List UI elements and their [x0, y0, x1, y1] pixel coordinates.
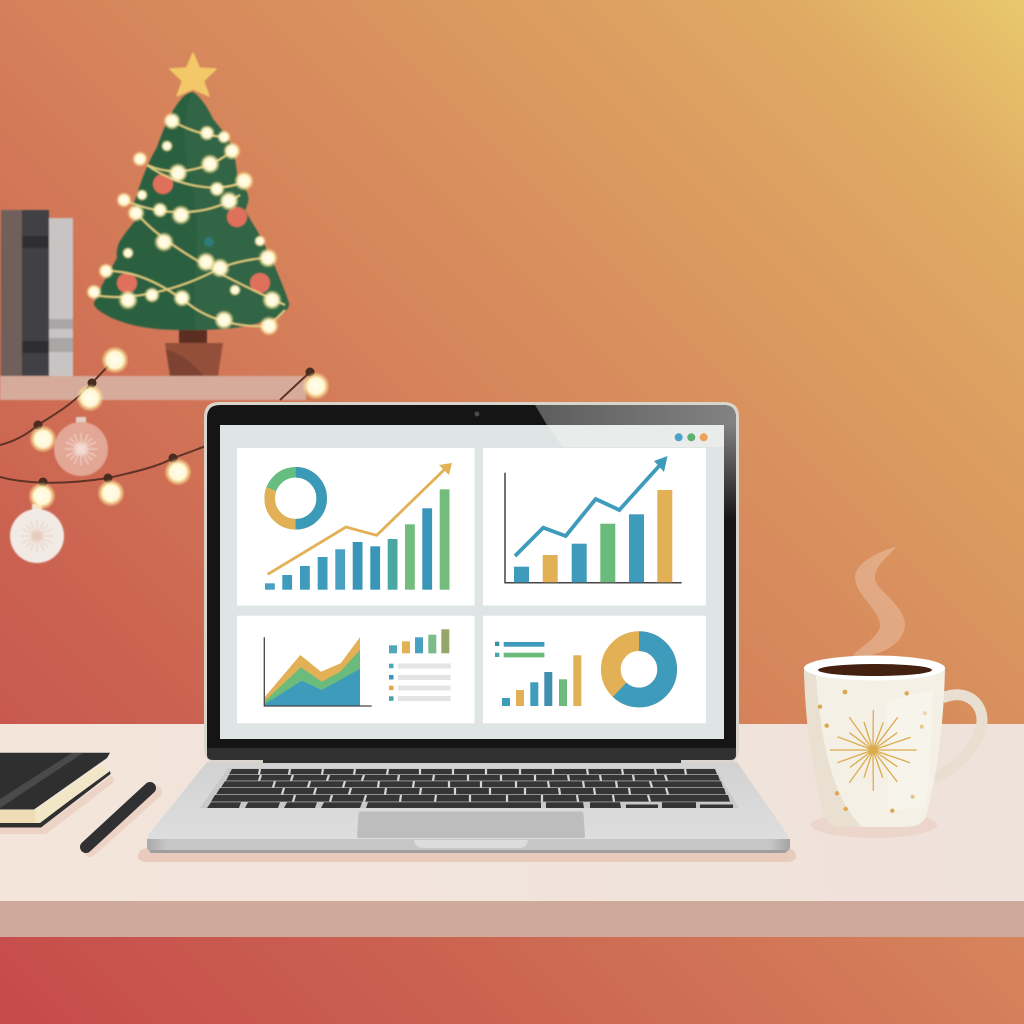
- keyboard well: [200, 768, 739, 808]
- notebook pages: [0, 764, 107, 823]
- coffee mug: [804, 547, 982, 838]
- mini bars: [389, 629, 449, 653]
- panel background: [483, 448, 706, 606]
- mug handle: [933, 695, 982, 778]
- notebook cover: [0, 753, 110, 810]
- tree trunk: [179, 330, 207, 344]
- light bulbs: [28, 346, 330, 510]
- pen: [86, 788, 156, 851]
- mug body: [804, 667, 945, 827]
- column bars: [514, 490, 672, 582]
- desk top: [0, 724, 1024, 901]
- lid frame: [204, 402, 739, 763]
- trackpad: [357, 812, 585, 838]
- screen background: [220, 425, 724, 739]
- mug highlight: [887, 690, 933, 810]
- window dots: [675, 433, 708, 441]
- mug side shade: [804, 667, 862, 827]
- white bauble: [10, 504, 64, 563]
- bar chart: [265, 489, 450, 590]
- tree foliage: [94, 92, 289, 330]
- light wires: [0, 364, 310, 483]
- tree star: [170, 53, 216, 96]
- panel: growth bars and donut: [237, 448, 474, 606]
- tree shading: [185, 92, 289, 330]
- mug dots: [818, 690, 927, 813]
- bezel reflection side: [724, 425, 736, 520]
- panel: column chart with arrow: [483, 448, 706, 606]
- legend: [495, 642, 544, 657]
- notebook back cover: [0, 771, 111, 828]
- notebook: [0, 753, 114, 834]
- screen reflection: [547, 425, 724, 447]
- shelf with books and tree: [0, 53, 306, 400]
- notebook strap: [0, 753, 83, 808]
- string lights: [0, 346, 330, 510]
- coffee: [818, 664, 932, 676]
- mug shadow: [811, 812, 937, 838]
- tree lights: [86, 112, 282, 336]
- screen: [220, 425, 724, 739]
- panel: area chart and list: [237, 616, 474, 723]
- desk: [0, 724, 1024, 937]
- pot shading: [166, 350, 204, 376]
- small bar chart: [502, 655, 581, 706]
- laptop base: [147, 762, 790, 853]
- pen shadow: [90, 792, 156, 851]
- trend arrow: [268, 463, 452, 574]
- books: [1, 210, 73, 376]
- sunburst decoration: [830, 710, 917, 791]
- notebook shadow: [0, 775, 114, 834]
- panel background: [483, 616, 706, 723]
- keyboard: [207, 769, 733, 808]
- christmas tree: [86, 53, 289, 376]
- desk front edge: [0, 901, 1024, 937]
- panel background: [237, 616, 474, 723]
- plant pot: [165, 343, 223, 376]
- shelf board: [0, 376, 306, 400]
- pink bauble: [54, 417, 108, 476]
- laptop shadow: [138, 848, 796, 862]
- large donut chart: [611, 641, 667, 698]
- line arrow: [515, 456, 668, 556]
- laptop lid: [204, 402, 739, 763]
- lid chin: [207, 748, 736, 763]
- steam: [853, 547, 905, 662]
- hanging baubles: [10, 417, 108, 563]
- front notch: [414, 840, 528, 848]
- base deck: [148, 762, 788, 841]
- notebook page edge: [0, 810, 35, 823]
- list rows: [389, 664, 451, 701]
- pen body: [86, 788, 150, 847]
- key gaps: [259, 769, 686, 802]
- webcam: [474, 412, 480, 416]
- donut chart: [270, 472, 322, 524]
- lid bezel: [207, 405, 736, 748]
- mug rim: [804, 656, 945, 680]
- chart axes: [505, 473, 682, 583]
- panel background: [237, 448, 474, 606]
- panel: bars and pie donut: [483, 616, 706, 723]
- area chart: [264, 637, 372, 706]
- bezel reflection top: [535, 405, 736, 425]
- keyboard rows: [207, 769, 733, 808]
- light sockets: [34, 368, 314, 486]
- laptop: [138, 402, 796, 862]
- base front edge: [147, 839, 790, 853]
- tree garland: [94, 121, 285, 326]
- tree ornaments: [117, 174, 270, 293]
